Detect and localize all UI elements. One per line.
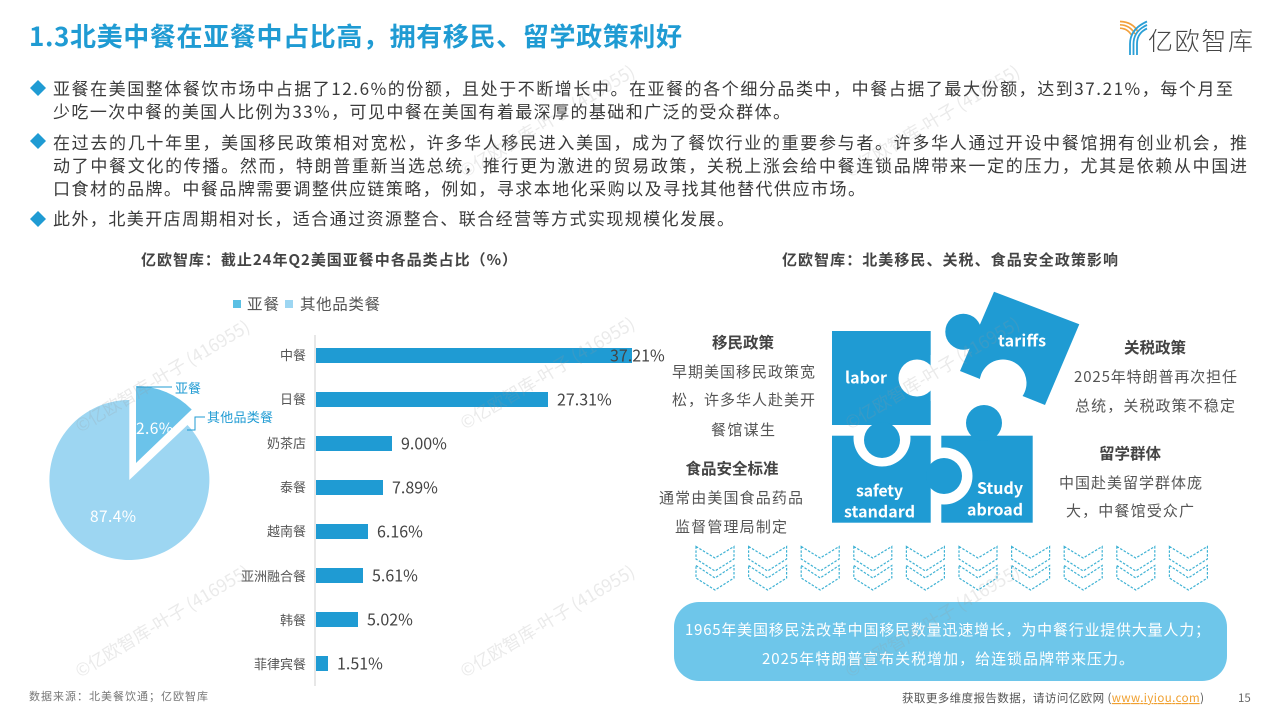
callout: 亚餐 xyxy=(137,378,201,397)
pie chart xyxy=(49,378,273,560)
legend xyxy=(233,292,380,314)
callout: summary pill: 1965年美国移民法改革中国移民数量迅速增长，为中餐行业提供大量人力； xyxy=(685,619,1210,640)
watermarks: ©亿欧智库-叶子 (416955) xyxy=(455,59,639,183)
text block: key points xyxy=(30,75,1247,230)
pie slice: Asian cuisine xyxy=(136,386,192,463)
callout: 其他品类餐 xyxy=(187,407,273,430)
watermarks: ©亿欧智库-叶子 (416955) xyxy=(70,314,254,438)
legend: 其他品类餐 xyxy=(300,292,380,314)
puzzle piece: tariffs xyxy=(945,292,1079,406)
bullet 1: 亚餐在美国整体餐饮市场中占据了12.6%的份额，且处于不断增长中。在亚餐的各个细分品类中，中餐占据了最大份额，达到37.21%，每个月至 xyxy=(53,75,1233,100)
bar: 日餐: 27.31% xyxy=(557,386,612,410)
bar: 泰餐: 泰餐 xyxy=(280,477,306,496)
heading: left chart: 亿欧智库：截止24年Q2美国亚餐中各品类占比（%） xyxy=(141,249,517,270)
bar: 奶茶店 xyxy=(267,430,447,454)
bar: 亚洲融合餐: 5.61% xyxy=(372,562,418,586)
puzzle piece: Study abroad: abroad xyxy=(967,496,1023,520)
bar: 越南餐: 越南餐 xyxy=(267,521,306,540)
puzzle diagram xyxy=(832,292,1079,523)
bullet 2: 口食材的品牌。中餐品牌需要调整供应链策略，例如，寻求本地化采购以及寻找其他替代供应市场。 xyxy=(53,175,865,200)
bar: 越南餐 xyxy=(267,518,423,542)
watermarks: ©亿欧智库-叶子 (416955) xyxy=(455,559,639,683)
watermarks: ©亿欧智库-叶子 (416955) xyxy=(840,59,1024,183)
heading: right chart: 亿欧智库：北美移民、关税、食品安全政策影响 xyxy=(782,249,1118,270)
callout: 其他品类餐: 其他品类餐 xyxy=(207,407,273,426)
bullet 2: 动了中餐文化的传播。然而，特朗普重新当选总统，推行更为激进的贸易政策，关税上涨会给中餐连锁品牌带来一定的压力，尤其是依赖从中国进 xyxy=(53,152,1247,177)
text block: immigration policy: 松，许多华人赴美开 xyxy=(672,389,815,410)
text block: tariff policy: 总统，关税政策不稳定 xyxy=(1075,395,1235,416)
page number: 15 xyxy=(1238,690,1251,706)
bar: 奶茶店: 奶茶店 xyxy=(267,433,306,452)
bullet 2: 在过去的几十年里，美国移民政策相对宽松，许多华人移民进入美国，成为了餐饮行业的重要参与者。许多华人通过开设中餐馆拥有创业机会，推 xyxy=(53,129,1247,154)
bar chart xyxy=(241,335,665,686)
watermarks: ©亿欧智库-叶子 (416955) xyxy=(455,311,639,435)
callout: 亚餐: 亚餐 xyxy=(175,378,201,397)
text block: immigration policy: 移民政策 xyxy=(712,331,774,353)
pie label: 87.4%: 87.4% xyxy=(90,505,136,527)
puzzle piece: Study abroad: Study xyxy=(977,475,1023,499)
callout: summary pill xyxy=(674,602,1227,681)
bar: 韩餐: 韩餐 xyxy=(280,610,306,629)
bar: 菲律宾餐: 1.51% xyxy=(337,650,383,674)
text block: students abroad: 中国赴美留学群体庞 xyxy=(1059,472,1202,493)
bullet 2 xyxy=(30,129,1247,200)
callout: summary pill: 2025年特朗普宣布关税增加，给连锁品牌带来压力。 xyxy=(762,648,1134,669)
text block: students abroad: 大，中餐馆受众广 xyxy=(1066,500,1194,521)
bar: 越南餐: 6.16% xyxy=(377,518,423,542)
bar: 菲律宾餐: 菲律宾餐 xyxy=(254,654,306,673)
puzzle piece: labor xyxy=(832,331,941,458)
puzzle piece: Study abroad xyxy=(916,405,1033,523)
text block: tariff policy xyxy=(1074,336,1237,416)
bar: 日餐 xyxy=(280,386,612,410)
text block: food safety standards: 监督管理局制定 xyxy=(675,516,787,537)
text block: food safety standards: 通常由美国食品药品 xyxy=(659,487,803,508)
bullet 1 xyxy=(30,75,1233,123)
bar: 亚洲融合餐 xyxy=(241,562,418,586)
bullet 1: 少吃一次中餐的美国人比例为33%，可见中餐在美国有着最深厚的基础和广泛的受众群体。 xyxy=(53,98,790,123)
text block: food safety standards xyxy=(659,457,803,537)
bar: 泰餐 xyxy=(280,474,438,498)
puzzle piece: safety standard: safety xyxy=(856,478,903,502)
watermarks: ©亿欧智库-叶子 (416955) xyxy=(840,559,1024,683)
text block: tariff policy: 关税政策 xyxy=(1124,336,1186,358)
chevron arrows xyxy=(696,546,1207,590)
legend: 亚餐 xyxy=(247,292,279,314)
watermarks: ©亿欧智库-叶子 (416955) xyxy=(70,559,254,683)
text block: students abroad: 留学群体 xyxy=(1099,442,1161,464)
bar: 中餐 xyxy=(280,342,665,366)
source note: 数据来源：北美餐饮通；亿欧智库 xyxy=(29,688,208,704)
bar: 韩餐 xyxy=(280,606,413,630)
title: 1.3北美中餐在亚餐中占比高，拥有移民、留学政策利好 xyxy=(29,17,682,54)
bar: 泰餐: 7.89% xyxy=(392,474,438,498)
text block: food safety standards: 食品安全标准 xyxy=(685,457,779,479)
puzzle piece: tariffs: tariffs xyxy=(998,328,1046,352)
pie slice: other cuisines xyxy=(49,400,209,560)
bar: 中餐: 37.21% xyxy=(610,342,665,366)
puzzle piece: safety standard: standard xyxy=(844,498,915,522)
bar: 中餐: 中餐 xyxy=(280,345,306,364)
pie label: 12.6%: 2.6% xyxy=(136,417,173,439)
watermarks: ©亿欧智库-叶子 (416955) xyxy=(840,311,1024,435)
text block: tariff policy: 2025年特朗普再次担任 xyxy=(1074,366,1237,387)
logo: 亿欧智库: 亿欧智库 xyxy=(1148,22,1253,58)
bar: 日餐: 日餐 xyxy=(280,389,306,408)
puzzle piece: labor: labor xyxy=(845,364,887,388)
bullet 3: 此外，北美开店周期相对长，适合通过资源整合、联合经营等方式实现规模化发展。 xyxy=(53,205,734,230)
watermarks xyxy=(70,59,1024,683)
text block: students abroad xyxy=(1059,442,1202,521)
bar: 菲律宾餐 xyxy=(254,650,383,674)
bar: 奶茶店: 9.00% xyxy=(401,430,447,454)
bar: 亚洲融合餐: 亚洲融合餐 xyxy=(241,566,306,585)
puzzle piece: safety standard xyxy=(832,410,962,523)
text block: immigration policy: 早期美国移民政策宽 xyxy=(672,361,815,382)
bar: 韩餐: 5.02% xyxy=(367,606,413,630)
text block: immigration policy: 餐馆谋生 xyxy=(711,419,775,440)
text block: immigration policy xyxy=(672,331,815,440)
footer contact: 获取更多维度报告数据，请访问亿欧网 (www.iyiou.com) xyxy=(902,690,1204,706)
